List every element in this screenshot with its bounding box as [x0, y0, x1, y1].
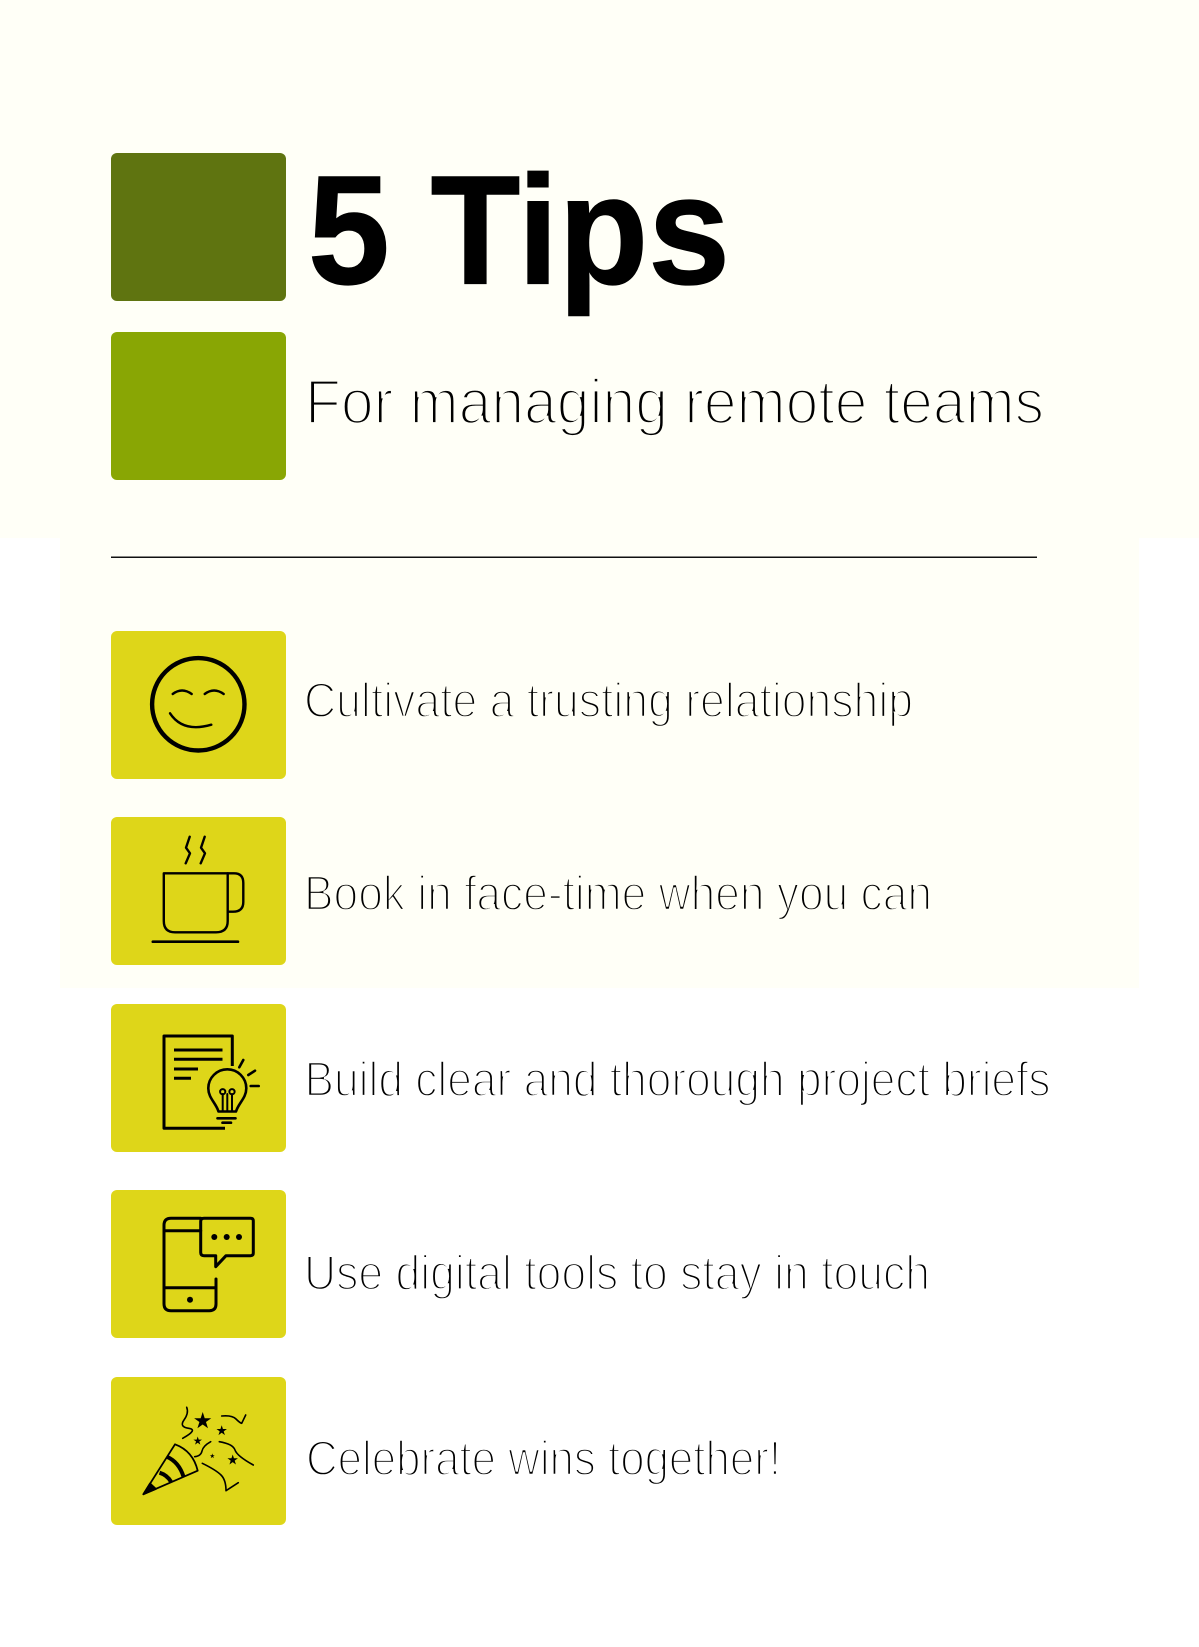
tip text: Book in face-time when you can — [304, 867, 932, 921]
icon: coffee cup — [153, 837, 243, 942]
icon badge — [111, 817, 286, 965]
icon badge — [111, 1004, 286, 1152]
tip 1 — [111, 631, 913, 779]
title: 5 Tips — [308, 144, 730, 316]
icon badge — [111, 631, 286, 779]
tip text: Use digital tools to stay in touch — [304, 1246, 930, 1300]
divider — [111, 556, 1037, 558]
icon: phone with speech bubble — [164, 1218, 253, 1311]
title colour block — [111, 153, 286, 301]
subtitle colour block — [111, 332, 286, 480]
icon: party popper — [143, 1407, 253, 1494]
icon: document with light bulb — [164, 1036, 259, 1128]
tip 2 — [111, 817, 932, 965]
tip 4 — [111, 1190, 930, 1338]
icon badge — [111, 1190, 286, 1338]
icon: smiling face — [152, 658, 244, 750]
cream background — [0, 0, 1199, 988]
header — [111, 144, 1044, 480]
tip 3 — [111, 1004, 1050, 1152]
tip 5 — [111, 1377, 781, 1525]
tip text: Celebrate wins together! — [306, 1432, 781, 1486]
tip text: Cultivate a trusting relationship — [304, 674, 913, 728]
icon badge — [111, 1377, 286, 1525]
tip text: Build clear and thorough project briefs — [304, 1053, 1050, 1107]
subtitle: For managing remote teams — [305, 368, 1044, 438]
